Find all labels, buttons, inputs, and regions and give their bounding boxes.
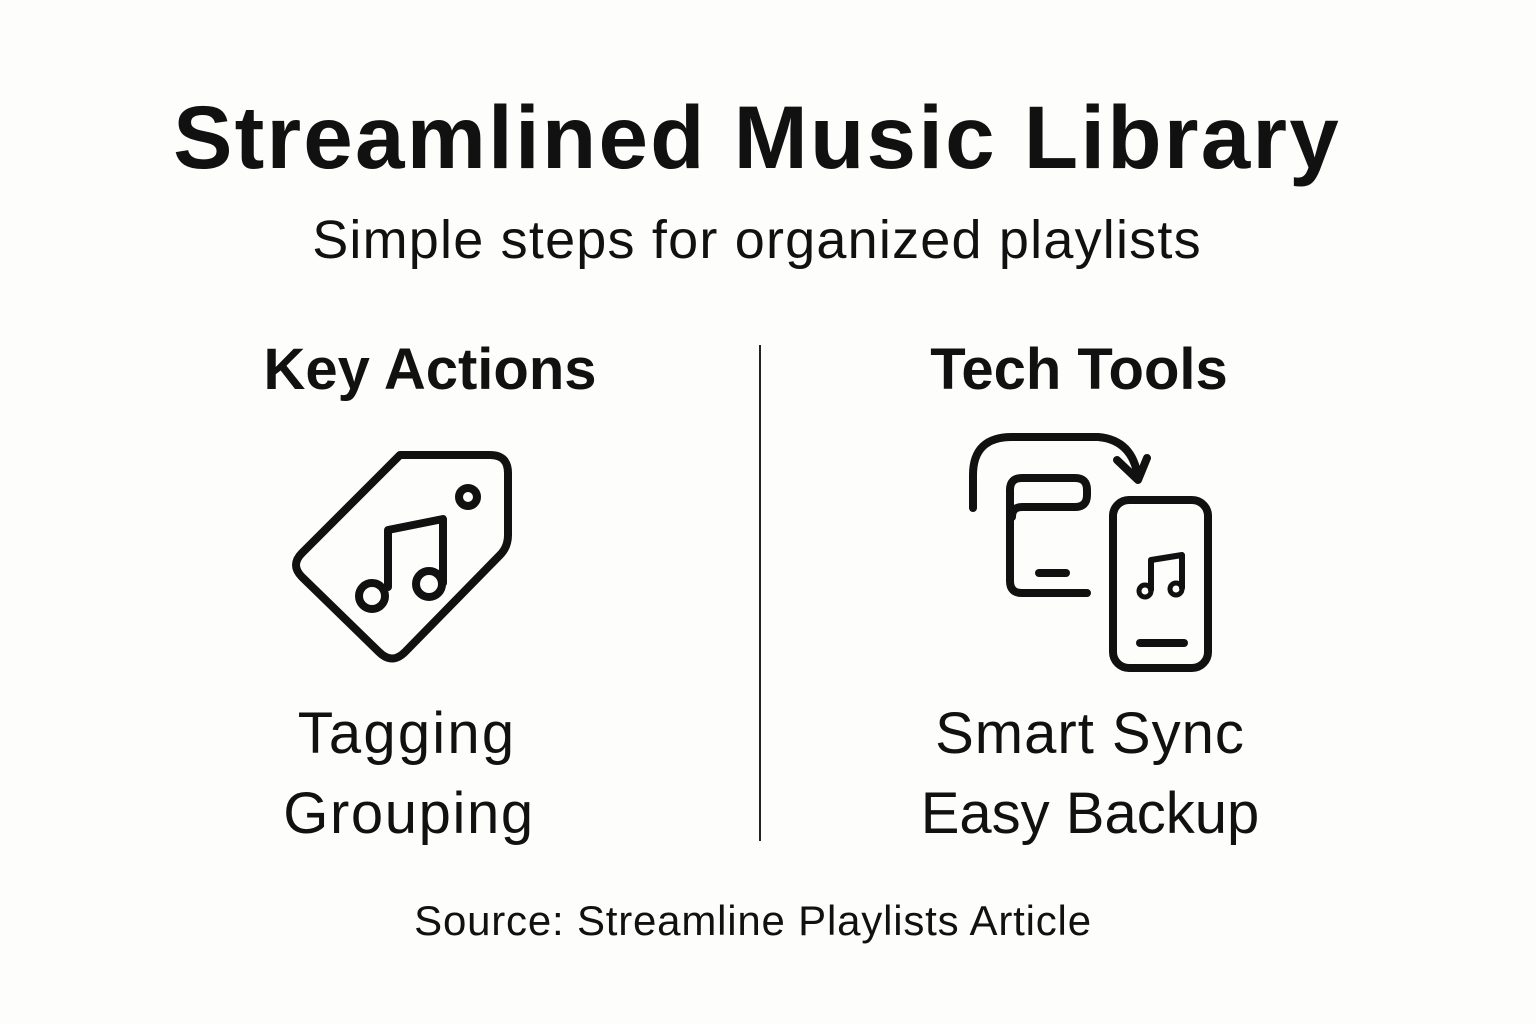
source: Source: Streamline Playlists Article <box>414 897 1092 944</box>
divider <box>759 345 761 841</box>
text: Easy Backup: Easy Backup <box>921 781 1259 846</box>
title: Streamlined Music Library <box>173 87 1341 187</box>
subtitle: Simple steps for organized playlists <box>312 210 1202 270</box>
text: Tagging: Tagging <box>298 701 516 766</box>
heading: Key Actions: Key Actions <box>263 337 597 402</box>
text: Grouping: Grouping <box>283 781 535 846</box>
heading: Tech Tools: Tech Tools <box>930 337 1228 402</box>
text: Smart Sync: Smart Sync <box>935 701 1245 766</box>
